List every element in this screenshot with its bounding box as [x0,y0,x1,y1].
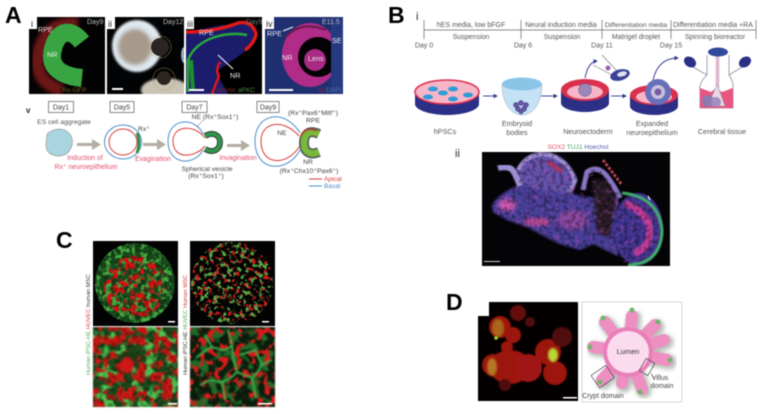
panel: D, intestinal organoid [446,289,682,402]
micrograph iii: Laminin aPKC: aPKC [238,87,255,94]
red step labels: Induction of [67,155,103,162]
diagram v: optic cup formation timeline: (Rx⁺Sox1⁺) [188,173,224,180]
micrograph i: Rx-GFP: RPE [38,25,53,34]
spinning bioreactor [682,48,753,108]
red step labels [54,155,257,171]
stage labels: neuroepithelium [626,128,678,137]
stage labels: bodies [506,128,528,137]
micrograph: whole organoid, right [190,241,275,326]
diagram v: optic cup formation timeline: RPE [306,118,320,124]
micrograph: whole organoid, left [93,241,178,326]
Day 5 vesicle [104,125,142,159]
micrograph iv: E11.5 eye: NR [282,53,292,62]
diagram v: optic cup formation timeline: Spherical vesicle [182,166,233,173]
stage labels: Expanded [636,119,668,128]
red step labels: Evagination [135,156,171,163]
micrograph iii: Laminin aPKC: NR [230,71,240,80]
diagram v: optic cup formation timeline: NE (Rx⁺Sox1⁺) [192,114,238,121]
stage labels: hPSCs [434,127,457,136]
expanded neuroepithelium dish [630,79,678,115]
micrograph iv: E11.5 eye: Lens [308,54,324,63]
day boxes: Day5 [114,104,130,112]
Day 1 aggregate: ES cell aggregate [37,119,91,126]
micrograph iv: E11.5 eye: E11.5 [322,19,340,26]
matrigel droplet on film [593,55,631,83]
protocol timeline: Suspension [453,34,489,41]
protocol timeline: Spinning bioreactor [685,34,746,41]
day boxes: Day7 [186,104,203,112]
micrograph ii: cerebral organoid section [482,152,670,266]
protocol timeline: Day 0 [415,42,433,50]
micrograph iii: Laminin aPKC: iii [187,19,193,29]
micrograph ii: bright-field aggregates: Day12 [163,19,183,26]
red step labels: Invagination [219,155,257,162]
heading: panel letter B: B [388,2,405,28]
process arrows [483,58,678,96]
neuroectoderm dish [561,79,609,112]
diagram v: optic cup formation timeline: Rx⁺ [138,126,150,133]
day boxes: Day9 [260,104,276,112]
apical / basal legend [309,176,342,190]
micrograph ii: bright-field aggregates [106,16,185,95]
protocol timeline [415,20,756,50]
protocol timeline: Day 15 [660,42,682,50]
micrograph i: Rx-GFP: Rx-GFP [62,87,87,94]
micrograph: close-up, right [190,327,275,407]
panel: A, optic cup organoid [5,2,343,190]
embryoid body well [502,78,542,115]
legend: SOX2 TUJ1 Hoechst: SOX2 TUJ1 Hoechst [547,144,609,151]
micrograph i: Rx-GFP: Day9 [87,19,103,26]
micrograph iv: E11.5 eye: ap [318,87,326,94]
micrograph iii: Laminin aPKC: Day9 [246,19,262,26]
stage labels: Cerebral tissue [698,127,746,136]
diagram v: optic cup formation timeline [26,102,342,190]
heading: panel letter C: C [56,227,73,253]
diagram: crypt and villus domains: domain [651,383,674,390]
panel: B, cerebral organoid protocol: ii [455,148,460,160]
stage labels [434,119,746,137]
Day 7 vesicle [168,120,220,161]
micrograph: organoid [478,302,578,401]
micrograph: close-up, left [93,327,178,407]
heading: panel letter A: A [5,2,22,28]
diagram: crypt and villus domains: Villus [652,375,669,382]
diagram v: optic cup formation timeline: NR [303,159,313,166]
red step labels: Rx⁺ neuroepithelium [54,164,118,171]
day boxes: Day1 [53,104,69,112]
diagram v: optic cup formation timeline: NE [277,130,287,137]
stage labels: Neuroectoderm [563,127,613,136]
micrograph i: Rx-GFP: i [31,19,33,29]
protocol timeline: Neural induction media [525,22,597,29]
protocol timeline: Matrigel droplet [612,34,660,41]
protocol timeline: Day 6 [514,42,532,50]
protocol timeline: hES media, low bFGF [437,22,505,29]
micrograph iii: Laminin aPKC: RPE [199,28,214,37]
day boxes [48,102,279,112]
apical / basal legend: Apical [324,176,342,183]
protocol timeline: Differentiation media +RA [673,22,753,29]
micrograph iii: Laminin aPKC [186,17,262,94]
diagram: crypt and villus domains [582,302,682,402]
hPSC dish [415,80,479,115]
micrograph iii: Laminin aPKC: Laminin [213,87,236,94]
micrograph iv: E11.5 eye [265,17,343,94]
diagram v: optic cup formation timeline: (Rx⁺Chx10⁺Pax6⁺) [280,168,338,175]
diagram v: optic cup formation timeline: (Rx⁺Pax6⁺Mitf⁺) [288,110,338,117]
protocol timeline: Suspension [544,34,580,41]
grey process arrows [77,139,250,151]
heading: panel letter D: D [446,289,463,315]
stage labels: Embryoid [502,119,532,128]
micrograph ii: bright-field aggregates: ii [108,19,112,29]
protocol timeline: Differentiation media [605,22,667,29]
rotated label, right column: Human iPSC-HE HUVEC Human MSC [183,275,189,375]
diagram v: optic cup formation timeline: v [26,106,31,115]
micrograph i: Rx-GFP [29,17,105,94]
panel: B, cerebral organoid protocol [388,2,756,266]
diagram: crypt and villus domains: Crypt domain [582,393,624,400]
Day 9 optic cup [255,117,319,166]
panel: B, cerebral organoid protocol: i [416,11,418,23]
micrograph iv: E11.5 eye: iv [266,19,273,29]
micrograph iv: E11.5 eye: SE [332,36,342,45]
micrograph i: Rx-GFP: NR [47,50,57,59]
micrograph iv: E11.5 eye: DAPI [326,87,341,94]
panel: C, vascularised organoids [56,227,275,407]
diagram: crypt and villus domains: Lumen [617,347,639,356]
apical / basal legend: Basal [324,183,341,190]
rotated label, left column: Human iPSC-HE HUVEC human MSC [86,273,92,375]
micrograph iv: E11.5 eye: RPE [267,29,282,38]
protocol timeline: Day 11 [591,42,613,50]
